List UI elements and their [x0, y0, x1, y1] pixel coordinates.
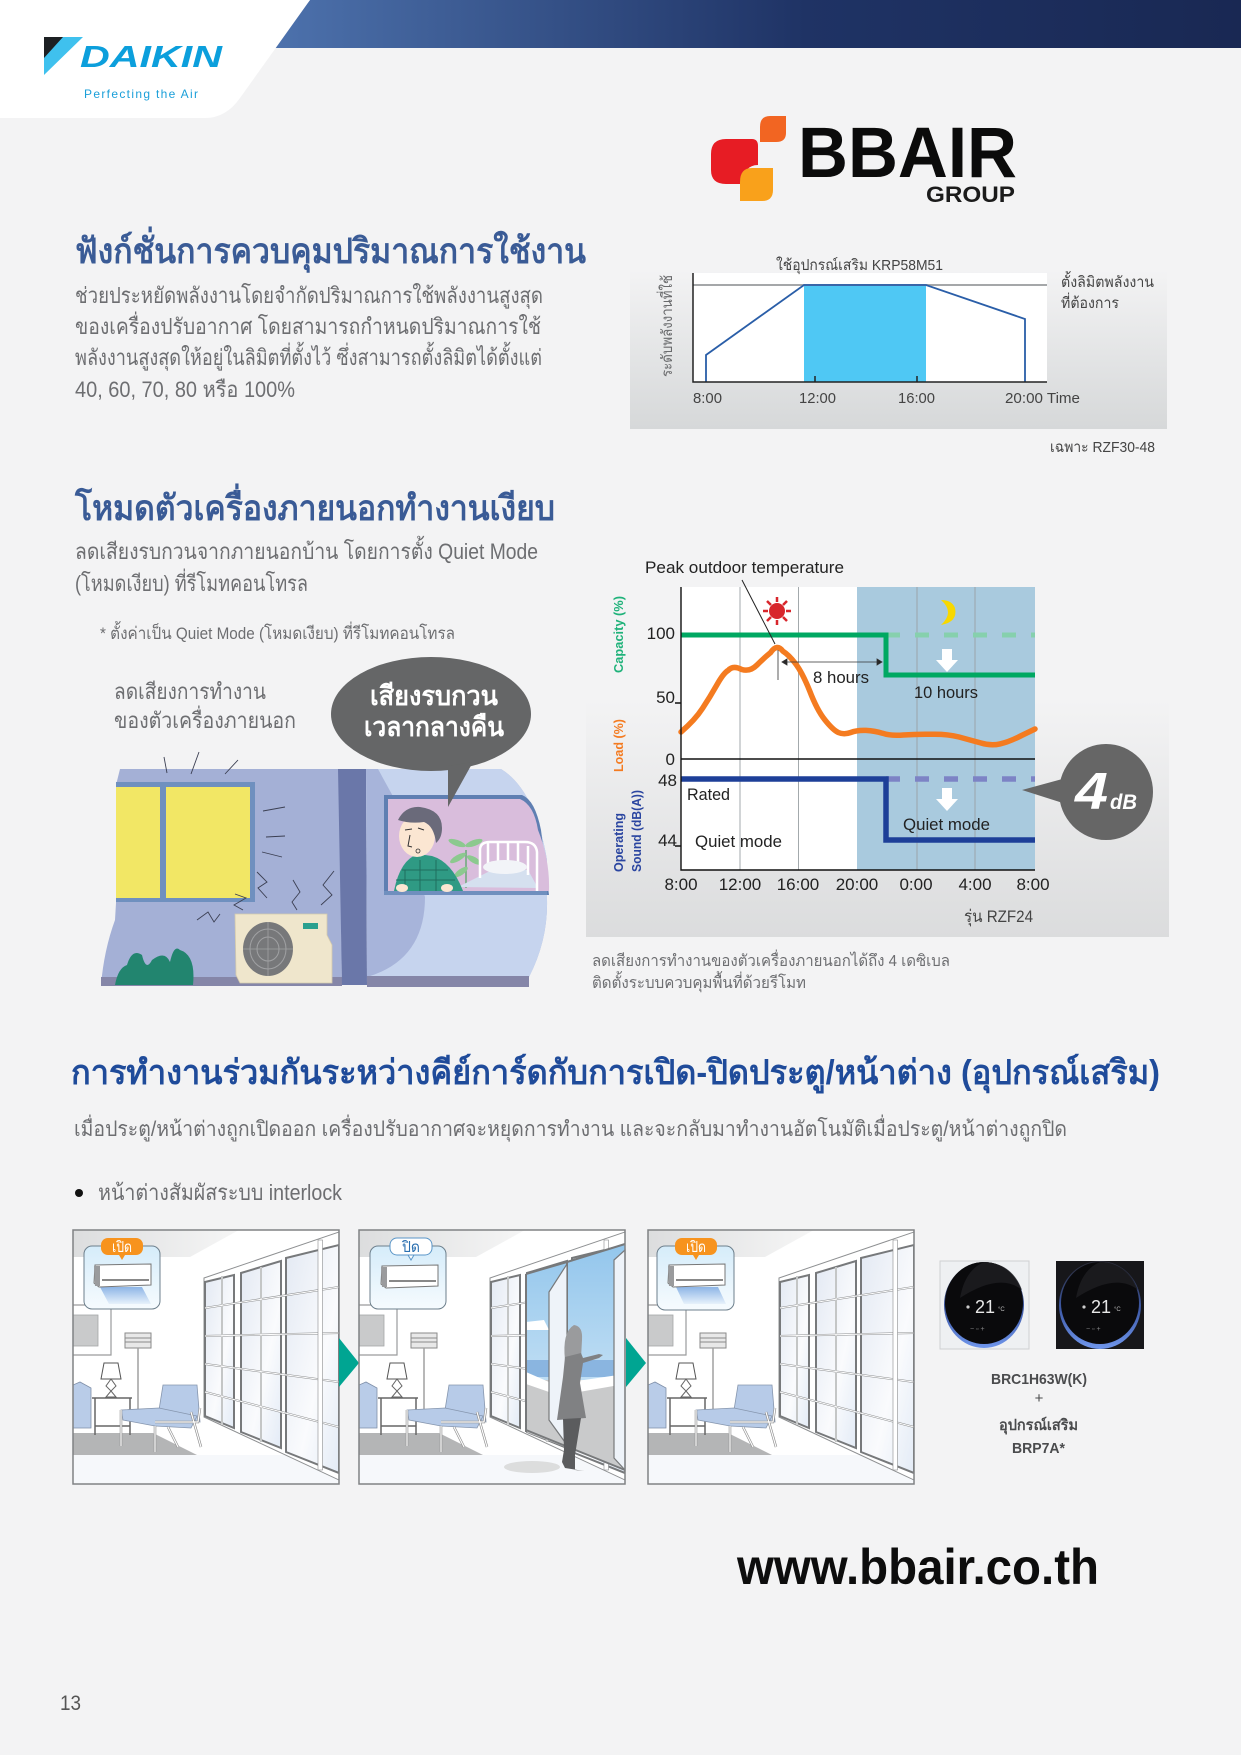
- tag: off: ปิด: [401, 1239, 420, 1256]
- frame: [73, 1230, 339, 1484]
- AC bubble: [370, 1246, 446, 1309]
- speech bubble: เสียงรบกวน: [370, 681, 499, 711]
- chart labels: ที่ต้องการ: [1061, 292, 1119, 312]
- right base: [367, 976, 529, 987]
- AC bubble: [84, 1246, 160, 1309]
- plant: [448, 837, 483, 888]
- tag: on: เปิด: [686, 1239, 706, 1256]
- remote caption: BRC1H63W(K): [991, 1371, 1087, 1388]
- man: [394, 807, 463, 892]
- chart labels: 12:00: [799, 390, 836, 407]
- chart labels: Rated: [687, 785, 730, 804]
- tag: off: [390, 1238, 432, 1260]
- chart labels: 8:00: [1016, 875, 1050, 894]
- scene 3: window closed, AC on: [648, 1230, 914, 1484]
- chart labels: 4:00: [958, 875, 992, 894]
- heading: interlock: การทำงานร่วมกันระหว่างคีย์การ์ดกับการเปิด-ปิดประตู/หน้าต่าง (อุปกรณ์เสริม): [71, 1053, 1160, 1094]
- chart labels: 16:00: [777, 875, 819, 894]
- tag: on: เปิด: [112, 1239, 132, 1256]
- tag: on: [101, 1238, 143, 1260]
- chart labels: 16:00: [898, 390, 935, 407]
- remote: white: °C: [998, 1307, 1005, 1313]
- daytime plot: [681, 587, 857, 870]
- illustration caption: ของตัวเครื่องภายนอก: [114, 705, 296, 733]
- BBAIR Group logo: [711, 114, 1017, 207]
- icon: moon: [941, 600, 955, 625]
- chart labels: รุ่น RZF24: [964, 907, 1033, 927]
- chart labels: [656, 256, 1154, 407]
- chart labels: 50: [656, 688, 675, 707]
- chart labels: [645, 558, 1050, 927]
- plot area: [693, 273, 1047, 382]
- chart labels: Peak outdoor temperature: [645, 558, 844, 577]
- bush: [115, 948, 193, 985]
- text block: quiet mode: ลดเสียงรบกวนจากภายนอกบ้าน โดยการตั้ง Quiet Mode: [75, 536, 538, 564]
- chart labels: 44: [658, 831, 677, 850]
- AC bubble: [657, 1246, 734, 1310]
- room window: [384, 795, 549, 895]
- room: [73, 1230, 339, 1484]
- remote: black: °C: [1114, 1307, 1121, 1313]
- capacity line: [681, 635, 1035, 675]
- frame: [648, 1230, 914, 1484]
- text block: demand control: 40, 60, 70, 80 หรือ 100%: [75, 377, 295, 402]
- remote: white: 21: [975, 1297, 995, 1317]
- logo plate: [0, 0, 310, 118]
- load curve: [681, 647, 1035, 745]
- left wall: [101, 769, 342, 985]
- callout: 4 dB: dB: [1110, 791, 1137, 814]
- axes: [675, 587, 1035, 870]
- right wall light: [367, 769, 547, 977]
- website: www.bbair.co.th: [736, 1539, 1099, 1595]
- scene 1: window closed, AC on: [73, 1230, 339, 1484]
- vibration marks: [164, 752, 334, 922]
- chart labels: 8 hours: [813, 668, 869, 687]
- chart panel: [630, 270, 1167, 429]
- axis titles: [611, 596, 644, 872]
- chart labels: 10 hours: [914, 683, 978, 702]
- text block: quiet mode: [75, 536, 538, 596]
- tag: on: [675, 1238, 717, 1260]
- woman silhouette: [557, 1325, 603, 1471]
- sound dashed: [886, 776, 1035, 782]
- chart labels: 20:00 Time: [1005, 390, 1080, 407]
- axis titles: Sound (dB(A)): [629, 790, 644, 872]
- window with yellow panes: [116, 782, 255, 902]
- power limit line: [693, 284, 1047, 286]
- text block: demand control: พลังงานสูงสุดให้อยู่ในลิมิตที่ตั้งไว้ ซึ่งสามารถตั้งลิมิตได้ตั้งแต่: [75, 342, 542, 371]
- bed: [458, 842, 538, 891]
- heading: demand control: ฟังก์ชั่นการควบคุมปริมาณการใช้งาน: [75, 226, 586, 273]
- night plot: [857, 587, 1035, 870]
- room: [648, 1230, 914, 1484]
- text block: quiet mode: (โหมดเงียบ) ที่รีโมทคอนโทรล: [75, 568, 308, 596]
- chart labels: 8:00: [664, 875, 698, 894]
- chart labels: 48: [658, 771, 677, 790]
- open window with sea view: [526, 1244, 625, 1470]
- text block: demand control: [75, 283, 543, 402]
- callout: 4 dB: 4: [1074, 763, 1108, 821]
- chart labels: 0: [666, 750, 675, 769]
- axis titles: Capacity (%): [611, 596, 626, 673]
- down arrow: capacity: [936, 649, 958, 672]
- chart labels: Quiet mode: [903, 815, 990, 834]
- arrow 1: [339, 1338, 359, 1387]
- axes: [693, 273, 1047, 382]
- remote caption: +: [1035, 1390, 1044, 1407]
- frame: [359, 1230, 625, 1484]
- span arrow: [778, 650, 882, 680]
- scene 2: window open, AC off: [359, 1230, 625, 1484]
- floor shadow: [504, 1461, 560, 1473]
- chart labels: ใช้อุปกรณ์เสริม KRP58M51: [776, 256, 943, 275]
- power curve: [706, 285, 1025, 382]
- text block: demand control: ของเครื่องปรับอากาศ โดยสามารถกำหนดปริมาณการใช้: [75, 311, 541, 339]
- grid lines: [740, 587, 975, 870]
- down arrow: sound: [936, 788, 958, 811]
- Daikin logo: DAIKIN: [80, 39, 223, 74]
- outdoor unit: [235, 914, 332, 983]
- illustration caption: [114, 679, 296, 733]
- bullet item: หน้าต่างสัมผัสระบบ interlock: [98, 1180, 343, 1205]
- sound line: [681, 779, 1035, 840]
- icon: sun: [763, 597, 791, 625]
- Daikin logo: [44, 37, 223, 101]
- model note: เฉพาะ RZF30-48: [1050, 439, 1155, 456]
- arrow 2: [626, 1338, 646, 1387]
- Daikin logo: Perfecting the Air: [84, 87, 198, 101]
- footnote: * ตั้งค่าเป็น Quiet Mode (โหมดเงียบ) ที่รีโมทคอนโทรล: [100, 621, 455, 643]
- axis titles: Operating: [611, 813, 626, 872]
- heading: quiet mode: โหมดตัวเครื่องภายนอกทำงานเงียบ: [74, 483, 555, 528]
- chart caption: [592, 949, 950, 993]
- chart labels: 8:00: [693, 390, 722, 407]
- remote: black: [1056, 1261, 1144, 1349]
- header band: [270, 0, 1241, 48]
- chart panel: [586, 700, 1169, 937]
- remote caption: [991, 1371, 1087, 1457]
- chart labels: 100: [647, 624, 675, 643]
- illustration: night noise: [101, 752, 549, 987]
- chart labels: 20:00: [836, 875, 878, 894]
- speech bubble: [331, 657, 531, 807]
- chart labels: ตั้งลิมิตพลังงาน: [1061, 271, 1154, 291]
- chart labels: 12:00: [719, 875, 761, 894]
- column: [338, 769, 367, 985]
- remote: black: 21: [1091, 1297, 1111, 1317]
- right wall: [366, 769, 547, 977]
- chart: quiet mode: [586, 558, 1169, 937]
- illustration caption: ลดเสียงการทำงาน: [114, 679, 266, 704]
- chart caption: ติดตั้งระบบควบคุมพื้นที่ด้วยรีโมท: [592, 971, 806, 993]
- BBAIR Group logo: GROUP: [926, 182, 1015, 207]
- remote caption: BRP7A*: [1012, 1440, 1065, 1457]
- chart: demand limit: [630, 256, 1167, 429]
- remote caption: อุปกรณ์เสริม: [999, 1416, 1078, 1435]
- speech bubble: เวลากลางคืน: [364, 712, 504, 742]
- chart labels: Quiet mode: [695, 832, 782, 851]
- remote: white: [940, 1261, 1029, 1349]
- remote: black: − ▫ +: [1086, 1326, 1101, 1333]
- axis titles: Load (%): [611, 719, 626, 772]
- chart labels: ระดับพลังงานที่ใช้: [656, 275, 676, 377]
- chart caption: ลดเสียงการทำงานของตัวเครื่องภายนอกได้ถึง 4 เดซิเบล: [592, 949, 950, 970]
- BBAIR Group logo: BBAIR: [798, 114, 1017, 193]
- page number: 13: [60, 1692, 81, 1715]
- callout: 4 dB: [1022, 744, 1153, 840]
- leader line: [742, 580, 775, 644]
- chart labels: 0:00: [899, 875, 933, 894]
- text block: interlock: เมื่อประตู/หน้าต่างถูกเปิดออก เครื่องปรับอากาศจะหยุดการทำงาน และจะกลับมาทำงานอัตโนมัติเมื่อประตู/หน้าต่างถูกปิด: [74, 1114, 1067, 1142]
- remote: white: − ▫ +: [970, 1326, 985, 1333]
- rated capacity dashed: [886, 632, 1035, 638]
- peak cut area: [804, 285, 926, 382]
- text block: demand control: ช่วยประหยัดพลังงานโดยจำกัดปริมาณการใช้พลังงานสูงสุด: [75, 283, 543, 309]
- room: [359, 1230, 625, 1484]
- base strip: [101, 977, 342, 986]
